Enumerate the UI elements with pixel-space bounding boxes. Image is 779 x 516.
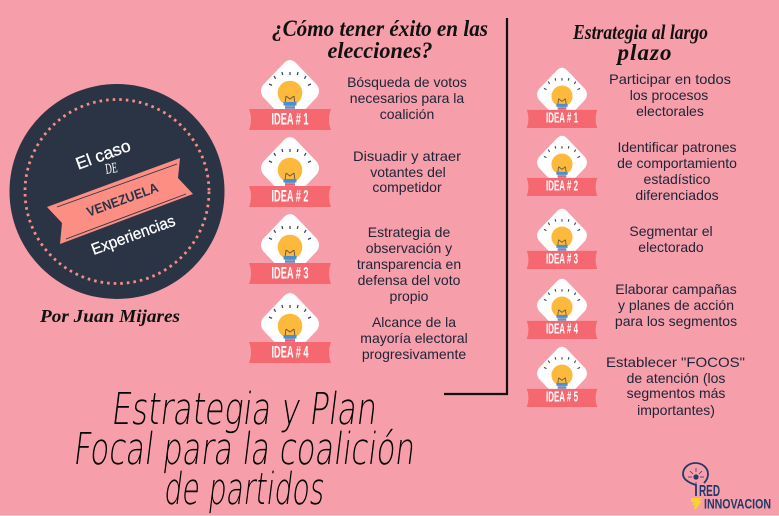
heading: estrategia al largo plazo: Estrategia al largo	[572, 20, 708, 44]
item: long-term idea 4: y planes de acción	[618, 297, 734, 313]
item: idea 1: coalición	[380, 106, 434, 122]
item: idea 1	[249, 60, 467, 130]
item: long-term idea 2: de comportamiento	[617, 155, 737, 171]
badge: El caso de Venezuela: Experiencias	[89, 213, 178, 259]
ribbon	[47, 158, 193, 244]
item: idea 2: Disuadir y atraer	[353, 148, 461, 164]
item: long-term idea 3: electorado	[638, 239, 704, 255]
heading: estrategia al largo plazo	[572, 20, 708, 65]
item: idea 3: transparencia en	[357, 256, 461, 272]
item: idea 3: observación y	[366, 240, 452, 256]
item: idea 1: Bósqueda de votos	[347, 74, 467, 90]
item: long-term idea 5: segmentos más	[627, 385, 725, 401]
logo: Red Innovacion: RED	[699, 483, 720, 500]
item: long-term idea 4: IDEA # 4	[546, 322, 578, 338]
main title: Estrategia y Plan	[109, 384, 380, 435]
item: idea 4: mayoría electoral	[360, 330, 468, 346]
divider line	[444, 18, 507, 394]
item: long-term idea 1: los procesos	[630, 87, 708, 103]
badge: El caso de Venezuela: El caso	[73, 136, 133, 174]
item: long-term idea 5	[527, 347, 745, 418]
item: idea 3: IDEA # 3	[272, 264, 308, 282]
item: long-term idea 4: para los segmentos	[615, 313, 737, 329]
item: long-term idea 5: Establecer "FOCOS"	[606, 354, 745, 370]
item: long-term idea 1: Participar en todos	[609, 71, 731, 87]
item: long-term idea 5: de atención (los	[627, 370, 725, 386]
item: long-term idea 5: importantes)	[637, 402, 715, 418]
item: long-term idea 2: estadístico	[644, 171, 711, 187]
author: Por Juan Mijares	[39, 306, 180, 326]
item: long-term idea 1: electorales	[636, 103, 704, 119]
item: long-term idea 3: IDEA # 3	[546, 252, 578, 268]
badge: El caso de Venezuela: VENEZUELA	[85, 180, 160, 220]
badge: El caso de Venezuela	[10, 84, 224, 299]
item: idea 3: defensa del voto	[358, 272, 461, 288]
item: long-term idea 2: IDEA # 2	[546, 178, 578, 194]
item: idea 4: Alcance de la	[372, 314, 456, 330]
item: long-term idea 4	[527, 279, 737, 339]
item: long-term idea 4: Elaborar campañas	[615, 281, 737, 297]
item: idea 3	[249, 214, 461, 304]
item: long-term idea 1: IDEA # 1	[546, 110, 578, 126]
item: long-term idea 2: Identificar patrones	[617, 139, 737, 155]
item: idea 2: IDEA # 2	[272, 188, 308, 206]
item: long-term idea 3: Segmentar el	[629, 223, 713, 239]
logo: Red Innovacion	[683, 463, 771, 512]
item: idea 2: votantes del	[370, 164, 446, 180]
item: idea 3: propio	[390, 288, 429, 304]
item: idea 2	[249, 137, 461, 207]
item: idea 4: IDEA # 4	[272, 344, 309, 362]
main title: Focal para la coalición	[71, 424, 418, 475]
item: idea 1: necesarios para la	[350, 90, 464, 106]
item: long-term idea 2	[527, 136, 737, 203]
item: long-term idea 5: IDEA # 5	[546, 390, 578, 406]
main title	[71, 384, 418, 515]
item: long-term idea 3	[527, 209, 713, 269]
heading: cómo tener éxito: ¿Cómo tener éxito en las	[272, 16, 488, 41]
heading: cómo tener éxito	[272, 16, 488, 63]
item: idea 2: competidor	[372, 179, 442, 195]
heading: estrategia al largo plazo: plazo	[616, 40, 672, 65]
item: idea 1: IDEA # 1	[272, 110, 308, 128]
main title: de partidos	[162, 464, 328, 515]
item: idea 4: progresivamente	[362, 346, 466, 362]
badge: El caso de Venezuela: DE	[104, 160, 118, 178]
item: long-term idea 1	[527, 68, 731, 128]
item: long-term idea 2: diferenciados	[635, 187, 719, 203]
item: idea 3: Estrategia de	[368, 224, 450, 240]
heading: cómo tener éxito: elecciones?	[328, 38, 432, 63]
item: idea 4	[249, 293, 468, 363]
